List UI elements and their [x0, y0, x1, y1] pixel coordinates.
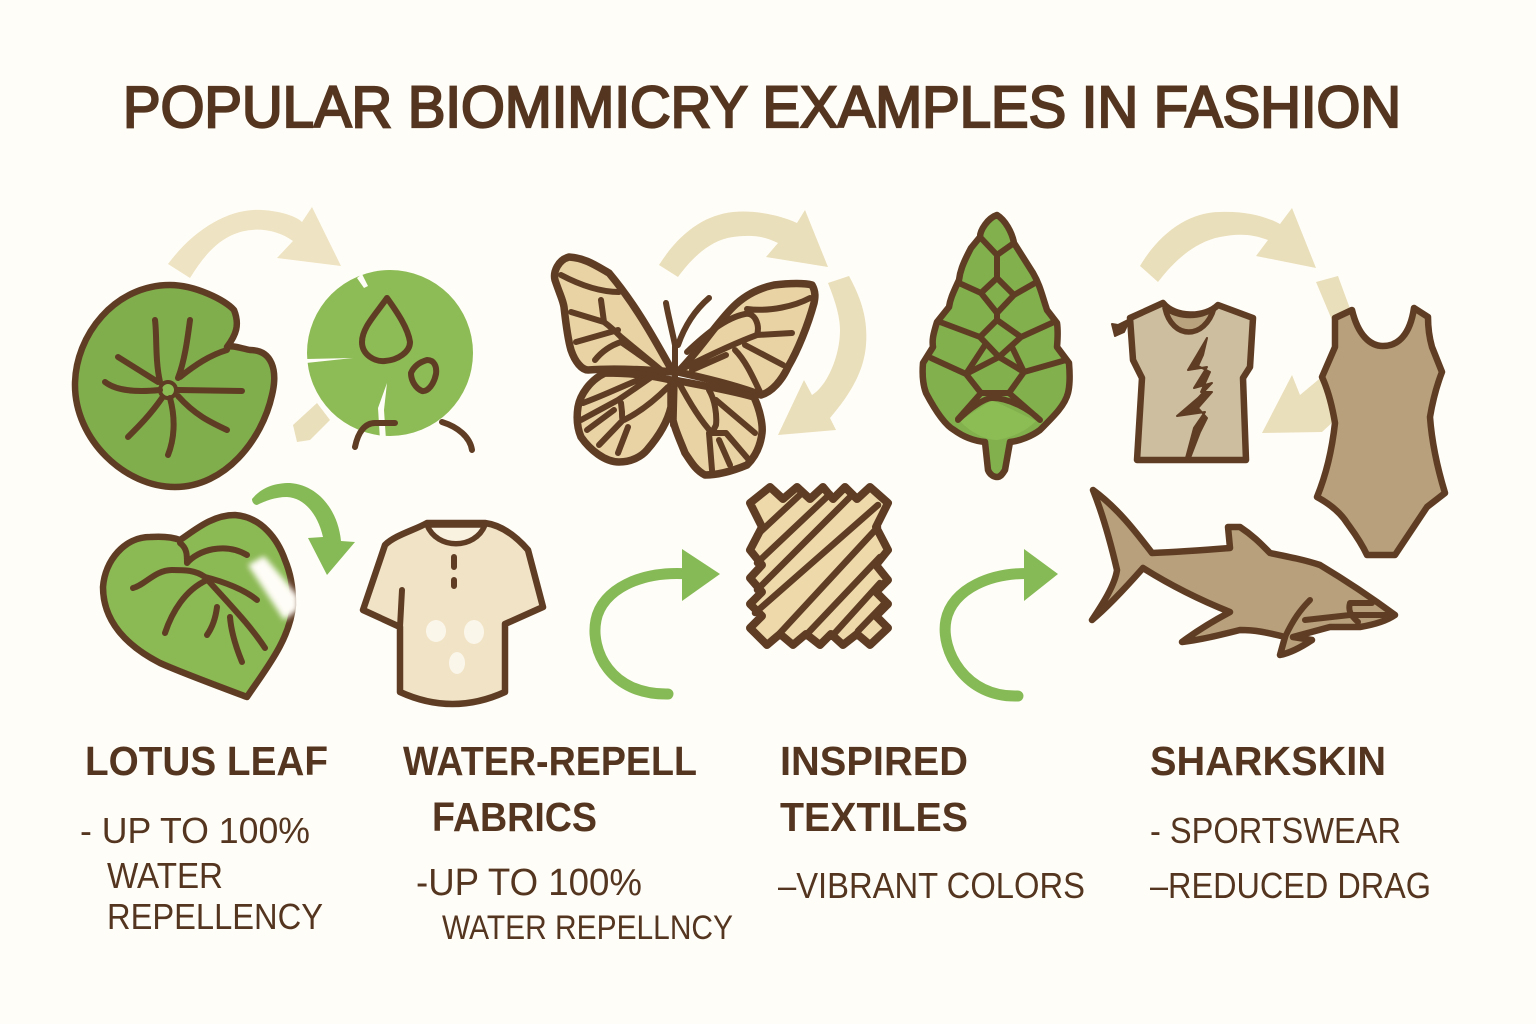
text: water-repell details: -UP TO 100% — [416, 862, 642, 904]
heading: inspired textiles: TEXTILES — [780, 794, 968, 840]
icon: diagonal woven textile — [750, 487, 888, 645]
icon: swimsuit — [1317, 308, 1445, 555]
arrow: shirt to textile — [595, 549, 720, 694]
text: lotus leaf details: WATER — [107, 855, 223, 896]
arrow: lotus top cycle — [168, 207, 341, 278]
arrow: leaf to shirt green — [252, 483, 355, 575]
icon: lotus pad — [75, 285, 274, 487]
arrow: sharkskin cycle top — [1140, 208, 1316, 282]
icon: pinecone — [923, 215, 1070, 477]
arrow: lotus return faint — [293, 403, 330, 442]
text: lotus leaf details — [80, 810, 323, 937]
heading: inspired textiles: INSPIRED — [780, 738, 968, 784]
text: water-repell details: WATER REPELLNCY — [442, 909, 733, 947]
icon: t-shirt with droplets — [363, 523, 543, 704]
heading: lotus leaf: LOTUS LEAF — [85, 738, 328, 784]
icon: veined leaf — [103, 515, 298, 697]
icon: water-repelling circle — [306, 270, 473, 450]
heading: sharkskin: SHARKSKIN — [1150, 738, 1386, 784]
arrow: textile to shark — [945, 549, 1058, 696]
icon: shark — [1092, 490, 1395, 655]
icon: butterfly — [555, 257, 815, 475]
text: sharkskin details: –REDUCED DRAG — [1150, 865, 1431, 906]
text: lotus leaf details: - UP TO 100% — [80, 810, 310, 851]
text: inspired textiles details: –VIBRANT COLORS — [778, 865, 1085, 906]
title: POPULAR BIOMIMICRY EXAMPLES IN FASHION — [123, 75, 1401, 140]
icon: torn shirt — [1112, 303, 1253, 460]
heading: water-repell fabrics: WATER-REPELL — [403, 738, 697, 784]
arrow: butterfly cycle top — [659, 210, 828, 277]
heading: inspired textiles — [780, 738, 968, 840]
text: sharkskin details: - SPORTSWEAR — [1150, 810, 1401, 851]
arrow: sharkskin cycle return — [1262, 276, 1352, 433]
text: lotus leaf details: REPELLENCY — [107, 896, 323, 937]
text: water-repell details — [416, 862, 733, 947]
heading: water-repell fabrics: FABRICS — [432, 794, 597, 840]
text: sharkskin details — [1150, 810, 1431, 906]
heading: water-repell fabrics — [403, 738, 697, 840]
arrow: butterfly cycle side — [778, 276, 866, 435]
